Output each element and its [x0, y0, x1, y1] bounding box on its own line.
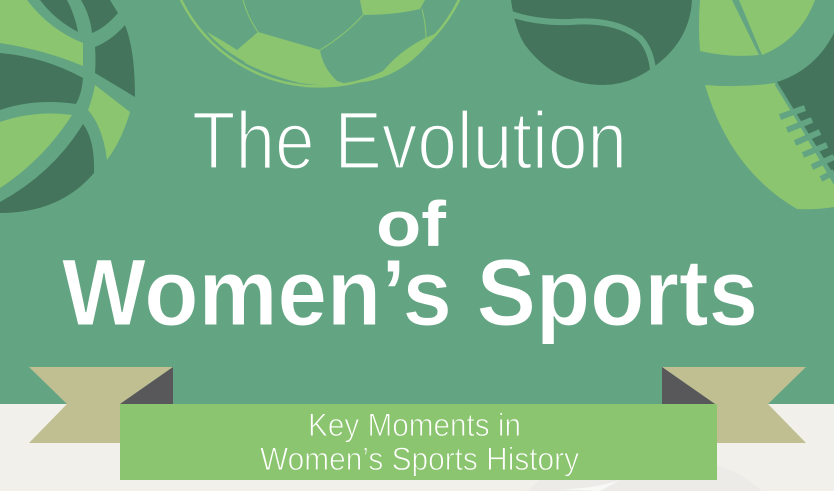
icon: basketball — [0, 0, 135, 213]
cream background strip — [0, 404, 834, 491]
title: The Evolution: The Evolution — [192, 96, 627, 186]
icon: soccer ball — [181, 0, 459, 86]
faint shape below the ribbon — [527, 465, 762, 491]
ribbon — [29, 367, 806, 480]
icon: football — [699, 0, 834, 209]
icon: tennis ball — [508, 0, 692, 85]
title: of: of — [376, 188, 447, 260]
ribbon text line two: Women’s Sports History — [260, 441, 579, 477]
left ribbon tail — [29, 367, 173, 443]
title: Women's Sports: Women’s Sports — [62, 240, 758, 346]
right ribbon fold — [662, 367, 715, 404]
left ribbon fold — [120, 367, 173, 404]
ribbon text line one: Key Moments in — [308, 407, 521, 443]
ribbon band — [120, 404, 717, 480]
right ribbon tail — [662, 367, 806, 443]
